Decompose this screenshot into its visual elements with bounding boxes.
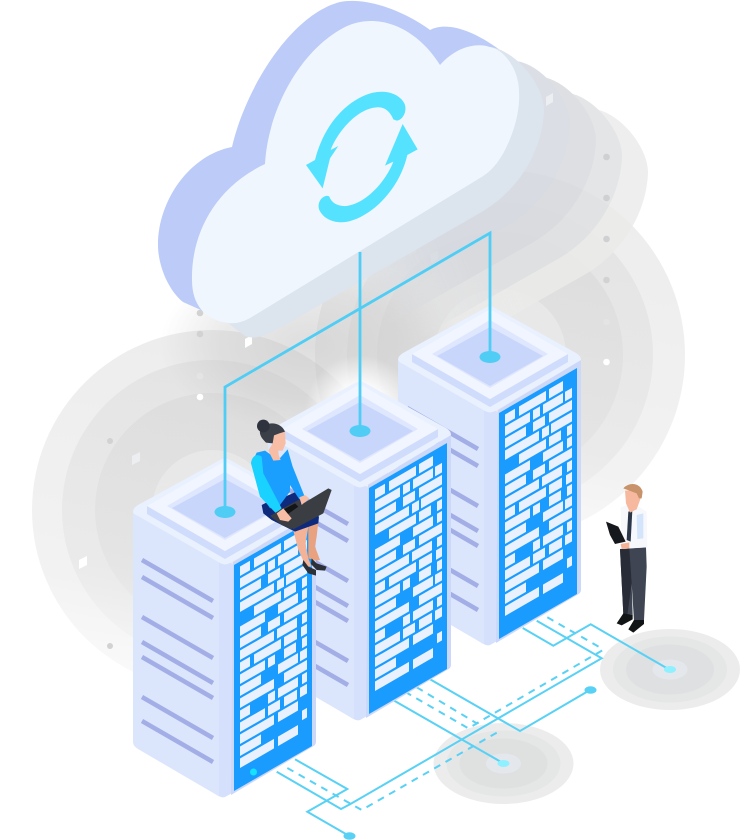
- icon: sync arrows: [306, 92, 418, 222]
- clipboard: [606, 522, 626, 544]
- shoes: [302, 558, 327, 576]
- glow behind middle server: [305, 355, 415, 465]
- laptop lid: [290, 488, 332, 529]
- connection dots: [214, 351, 500, 518]
- cloud shadows: [286, 61, 648, 400]
- trouser shadow: [620, 549, 632, 615]
- cloud connection lines: [225, 233, 490, 511]
- back leg: [308, 522, 320, 561]
- cloud back face: [158, 1, 500, 323]
- laptop base: [270, 499, 301, 529]
- soft shadow under cloud: [160, 255, 460, 435]
- hair: [623, 484, 643, 498]
- shadow particles: [488, 93, 610, 242]
- target pad bottom: [434, 723, 574, 804]
- woman with laptop: [251, 420, 332, 576]
- cloud: [158, 1, 544, 338]
- circuit wires: [277, 617, 670, 836]
- shirt shade: [637, 513, 643, 539]
- hair: [260, 423, 285, 443]
- wire end dots: [344, 666, 676, 840]
- hands: [608, 528, 629, 549]
- sweater: [252, 449, 305, 508]
- arm: [251, 455, 282, 513]
- server rack middle: [268, 382, 451, 720]
- skirt: [262, 492, 319, 532]
- shirt: [621, 503, 647, 549]
- tie: [627, 511, 632, 542]
- inner highlight right: [434, 289, 566, 421]
- background circles right: [315, 170, 685, 540]
- trousers: [620, 547, 647, 621]
- cloud front face: [192, 21, 519, 323]
- server rack front: [133, 458, 316, 797]
- hair bun: [257, 420, 270, 432]
- keyboard: [283, 503, 298, 515]
- neck and face: [268, 432, 286, 461]
- server rack back: [398, 306, 581, 645]
- businessman: [606, 484, 647, 633]
- background circles left: [32, 330, 392, 690]
- inner highlight left: [152, 450, 272, 570]
- status light: [250, 768, 257, 776]
- cloud depth face: [228, 47, 544, 338]
- front leg: [293, 527, 312, 567]
- shoes: [617, 613, 644, 633]
- target pad right: [600, 629, 740, 710]
- hands: [277, 495, 309, 522]
- head: [625, 490, 641, 513]
- floating particles: [79, 154, 610, 649]
